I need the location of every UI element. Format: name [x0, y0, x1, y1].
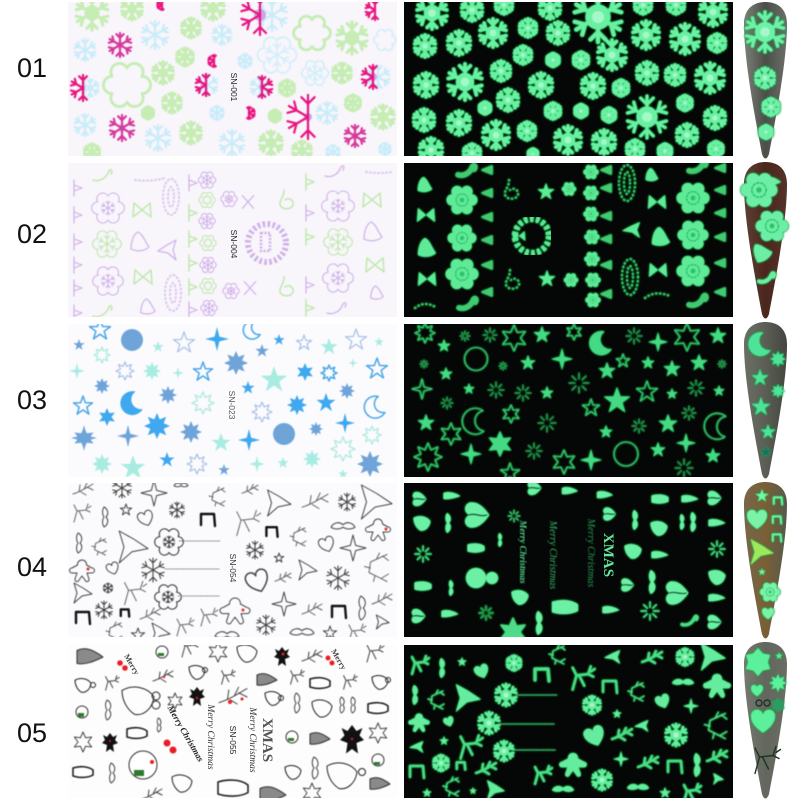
sheet code: SN-004	[229, 230, 239, 259]
row label 05: 05	[17, 718, 47, 748]
gingerbread red buttons	[86, 528, 388, 612]
glowing outlined stars, moons and circles	[412, 323, 733, 481]
sheet code: SN-001	[229, 73, 239, 102]
panel: sticker sheet SN-004	[68, 163, 397, 317]
glowing tridents and canes	[458, 161, 725, 308]
trees, hearts, stars and moustaches	[70, 480, 392, 643]
sheet code: SN-023	[227, 391, 237, 420]
nail 01	[744, 2, 787, 158]
wreath	[248, 224, 286, 262]
glowing motifs on nail	[746, 648, 787, 733]
red berries	[109, 652, 353, 764]
nail 05	[744, 642, 787, 798]
moustaches, deer, branches and stars	[74, 639, 387, 800]
green flowers	[93, 192, 352, 294]
purple flowers	[92, 172, 354, 316]
panel: glow sheet 05	[404, 645, 733, 798]
deer, antlers and branches	[73, 483, 392, 642]
sheet code: SN-055	[228, 726, 238, 755]
panel: glow sheet 03	[404, 324, 733, 477]
aqua stars	[69, 337, 384, 479]
sheet code: SN-054	[228, 554, 238, 583]
dark deer and glasses on nail	[755, 700, 780, 774]
lettering: Merry Christmas: Merry Christmas	[205, 703, 215, 770]
dotted purple trees	[135, 172, 392, 311]
panel: sticker sheet SN-023	[69, 324, 389, 477]
lettering: Merry Christmas: Merry Christmas	[247, 706, 257, 773]
lacy pale blue snowflakes	[258, 30, 396, 85]
glowing stars on nail	[748, 332, 786, 457]
panel: glow sheet 01	[404, 2, 733, 156]
glowing snowflakes	[433, 648, 694, 790]
steel blue discs and stars	[71, 329, 383, 477]
snowman scarves	[78, 653, 380, 776]
outlined blue stars	[74, 319, 387, 418]
glowing motifs on nail	[747, 489, 782, 619]
panel: sticker sheet SN-054	[68, 483, 394, 637]
nail 04	[744, 482, 787, 638]
black music-note shapes	[76, 514, 346, 624]
penguins	[73, 678, 388, 796]
panel: glow sheet 04	[404, 483, 733, 637]
row label 03: 03	[17, 385, 47, 415]
glowing filled stars	[417, 326, 727, 471]
panel: sticker sheet SN-055	[71, 645, 392, 798]
glowing snowflakes	[413, 0, 727, 162]
light blue snowflakes	[74, 0, 391, 159]
dim star bursts	[420, 328, 726, 477]
santa faces	[75, 645, 390, 792]
glowing snowflakes on nail	[745, 12, 785, 138]
green snowflakes	[75, 0, 395, 161]
lettering: small Merry Christmas: Merry	[329, 648, 348, 671]
santa hats	[77, 649, 390, 800]
green tridents, bows, canes and hooks	[93, 170, 384, 317]
glowing santas, penguins, trees and moustaches	[412, 481, 726, 635]
panel: glow sheet 02	[404, 163, 733, 317]
magenta half snowflakes	[70, 0, 378, 147]
lettering: XMAS: XMAS	[259, 718, 275, 762]
row label 01: 01	[17, 53, 47, 83]
pale lilac flake centres	[80, 9, 377, 140]
glowing dotted garlands	[415, 165, 670, 308]
nail 02	[741, 162, 788, 318]
black holly leaves	[102, 647, 364, 754]
large outlined green snowflakes	[103, 16, 330, 107]
lettering: small Merry Christmas: Merry	[122, 652, 141, 676]
nail 03	[744, 322, 787, 478]
glowing asterisks	[415, 510, 725, 646]
glowing lettering: Merry Christmas: Merry Christmas	[547, 520, 558, 589]
snowmen	[76, 646, 384, 779]
glowing deer, antlers and branches	[410, 645, 727, 800]
outlined pale stars	[116, 329, 366, 474]
lettering: bold Merry Christmas: Merry Christmas	[165, 703, 206, 764]
bright blue stars and moon	[99, 327, 355, 466]
glowing lettering: XMAS: XMAS	[600, 533, 616, 577]
glowing wreath	[513, 219, 549, 253]
purple tridents, bells, trees and canes	[74, 166, 383, 321]
row label 04: 04	[17, 552, 47, 582]
glowing hearts, trees and gingerbread	[408, 643, 731, 800]
panel: sticker sheet SN-001	[68, 2, 397, 156]
glowing lettering: Merry Christmas: Merry Christmas	[518, 519, 528, 584]
glowing flowers, bows and bells	[417, 165, 709, 307]
glowing lettering: Merry Christmas: Merry Christmas	[585, 518, 596, 587]
outlined aqua bursts	[94, 347, 381, 461]
row label 02: 02	[17, 219, 47, 249]
glowing motifs on nail	[741, 173, 788, 282]
dark outline flakes	[95, 478, 356, 635]
